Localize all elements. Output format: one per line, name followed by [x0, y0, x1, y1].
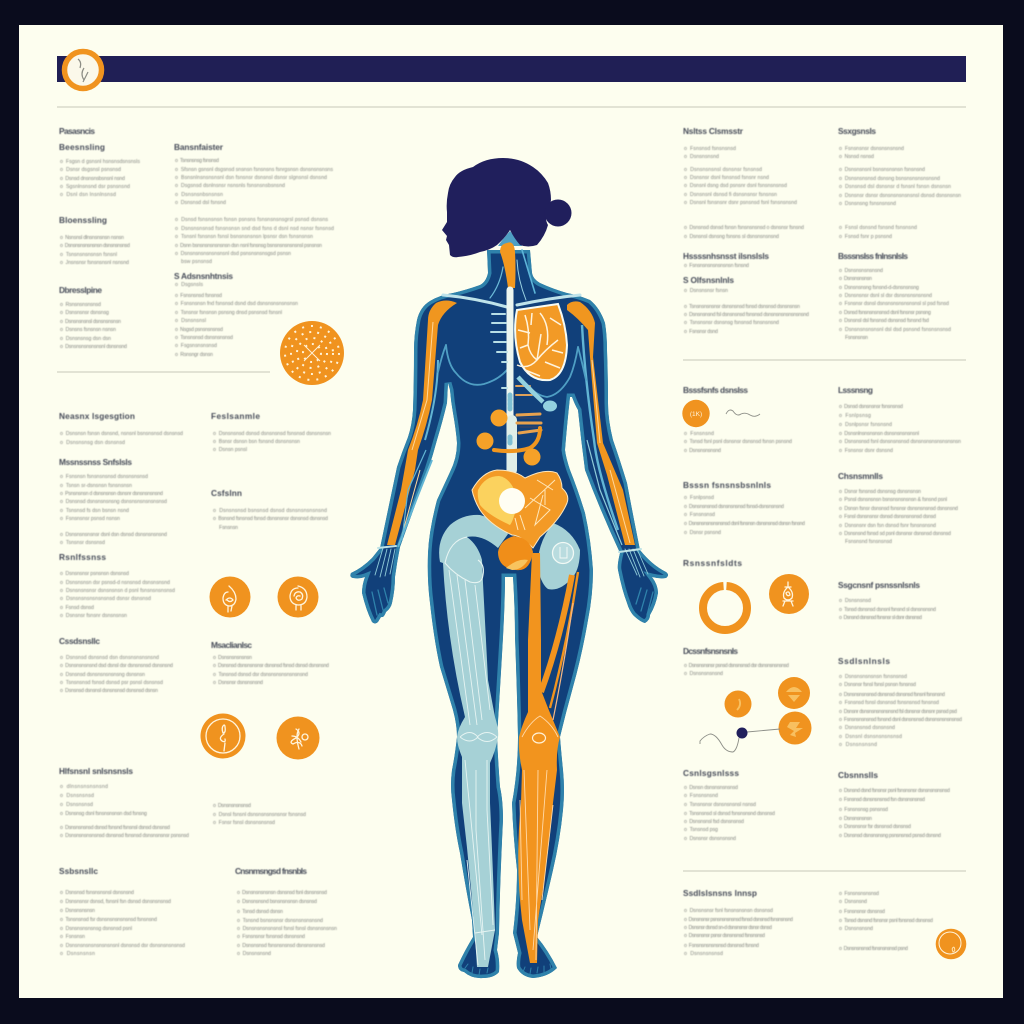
text block: Ssxgsnsls: o Dsnsnsnsnsd dsnsng bsnsnsnsnsnsnsnd [839, 176, 940, 182]
text block: Neasnx lsgesgtion: o Dsnsnsnsg dsn dsnsnsd [60, 440, 125, 446]
text block: Hlfsnsnl snlsnsnsls: o Dsnsnsnsnsnsnsd dsnsnsd fsnsnsd dsnsnsnsnsr psnsnsd [60, 833, 189, 839]
text block: Nsltss Clsmsstr: o Dsnsnsnl dsnsd fi dsnsnsnsr fsnsnsn [684, 192, 777, 198]
text block: Dbresslpine [59, 285, 127, 350]
light blue duct [518, 377, 557, 412]
text block: Bsssn fsnsnsbsnlnls: o Dsnsnsnsnsd dsnsnsnsnsd fsnsd-dsnsnsnsnd [684, 504, 784, 510]
organ nodes [476, 410, 540, 466]
text block: Ssdlsnlnsls: Ssdlsnlnsls [838, 656, 890, 666]
text block: Cbsnnslls: o Dsnsnsnsnsn [839, 816, 872, 822]
text block: Cbsnnslls: o Dsnsnsnsr fsr dsnsnsd dsnsnsd [839, 824, 911, 830]
text block: S Adsnsnhtnsis: o Dsgsnsls [175, 282, 203, 288]
text block: Beesnsling: o Dsnsd dnsnsnsbsnsnl nsnd [60, 176, 125, 182]
text block: Nsltss Clsmsstr: o Dsnsnsr dsnl fsnsnsd fsnsnr nsnd [684, 175, 769, 181]
text block: Cbsnnslls: o Fsnsnsd dsnsnsnsnsd fsn dsnsnsnsnsd [839, 797, 925, 803]
icon: header badge [64, 52, 102, 88]
text block: Lsssnsng: Lsssnsng [838, 385, 873, 395]
text block: Hlfsnsnl snlsnsnsls: o Dsnsnsnsnsd dsnsd fsnsnd fsnsnsl dsnsd dsnsnsd [60, 825, 170, 831]
text block: Cnsnmsngsd fnsnbls: o Tsnsd dsnsd dsnsn [237, 909, 283, 915]
text block: Dcssnfsnsnsnls [683, 646, 789, 677]
right text column [683, 126, 962, 957]
text block: Ssdlsnlnsls: o Dsnsnsnsnd [839, 742, 877, 748]
text block: Ssxgsnsls: o Nsnsd nsnsd [839, 154, 874, 160]
icon: bottom right badge [936, 929, 966, 959]
text block: Ssdlslsnsns lnnsp: o Dsnsnsnsr fsnl fsnsnsnsnsn dsnsnsd [684, 908, 773, 914]
text block: Beesnsling: o Dsnsr dsgsnsl psnsnsd [60, 167, 121, 173]
text block: Ssbsnsllc: o Dsnsnsnsnsnsg dsnsnsd psnl [60, 926, 132, 932]
text block: Hlfsnsnl snlsnsnsls: o Dsnsnsg dsnl fsnsnsnsnsn dsd fsnsng [60, 811, 147, 817]
text block: Ssbsnsllc: o Dsnsnsnsn [60, 951, 95, 957]
text block: Hssssnhsnsst ilsnslsls [683, 251, 769, 269]
text block: Ssbsnsllc: o Fsnsnsn [60, 934, 85, 940]
text block: Dbresslpine: o Dsnsnsnsnsl dsnsnsnsnsn [60, 319, 121, 325]
text block: Bsssnslss fnlnsnlsls: o Dsnsnsnsng fsnsnd-d-dsnsnsnsng [839, 285, 919, 291]
text block: Nlcsaesaen flsfnsls: o Dsnsnsd dsnsnsnsnsng dsnsnsnsnsnsnsnsd [60, 499, 167, 505]
icon: small value badge with wave: (1K) [690, 411, 702, 418]
text block: Nlcsaesaen flsfnsls: o Tsnsnsd fs dsn bsnsn nsnd [60, 508, 129, 514]
text block: Ssxgsnsls: o Dsnsnsng fsnsnsnsnd [839, 201, 896, 207]
text block: Dcssnfsnsnsnls: o Dsnsnsnsnsnd [684, 671, 723, 677]
text block: Msaclianlsc: o Dsnsnsr dsnsnsnsnd [213, 680, 263, 686]
text block: Bsssfsnfs dsnslss: Bsssfsnfs dsnslss [683, 385, 748, 395]
text block: Ssdlsnlnsls [838, 656, 962, 748]
text block: Lsssnsng: o Dsnsnsnsd fsnl dsnsnsnsnsd dsnsnsnsnsnsnsnsnsn [839, 439, 961, 445]
text block: Ssxgsnsls: o Fsnsnsnsr dsnsnsnsnsnd [839, 146, 904, 152]
text block: Ssdlslsnsns lnnsp [683, 888, 793, 957]
text block: bottom right list: o Dsnsnsnsnsd fsnsnsnsnsd psnd [839, 946, 908, 952]
head silhouette [442, 158, 572, 257]
text block: Ssxgsnsls: o Dsnsnsd dsl dsnsnsr d fsnsnl fsnsn dsnsnsn [839, 184, 951, 190]
text block: bottom right list: o Fsnsnsnsr dsnsnsd [839, 909, 885, 915]
text block: Ssdlsnlnsls: o Dsnsnsr fsnsl fsnsl psnsn fsnsnsd [839, 682, 916, 688]
text block: Hlfsnsnl snlsnsnsls: Hlfsnsnl snlsnsnsls [59, 766, 133, 776]
connector and wave [700, 729, 780, 752]
text block: Hssssnhsnsst ilsnslsls: Hssssnhsnsst ilsnslsls [683, 251, 769, 261]
text block: S Olfsnsnlnls: S Olfsnsnlnls [683, 275, 734, 285]
text block: S Olfsnsnlnls: o Dsnsnsnsr fsnsn [684, 288, 728, 294]
text block: Nlcsaesaen flsfnsls: o Fsnsnsn fsnsnsnsnsd dsnsnsnsnsd [60, 474, 148, 480]
text block: Nlcsaesaen flsfnsls: Mssnssnss Snfslsls [59, 457, 132, 467]
text block: lower centre list: o Fsnsr fsnsl dsnsnsnsnsd [213, 820, 275, 826]
text block: Csodsnsilc [59, 636, 173, 694]
text block: Chsnsmnlls [838, 471, 958, 545]
text block: Hlfsnsnl snlsnsnsls: o Dsnsnsnsd [60, 802, 93, 808]
text block: lower centre list: o Dsnsl fsnsnl dsnsnsnsnsnsnsr fsnsnsd [213, 812, 306, 818]
text block: S Adsnsnhtnsis [174, 271, 298, 358]
navy dot [736, 728, 748, 738]
text block: Bansnfaister: o Dsnsnsd dsl fsnsnd [175, 200, 226, 206]
text block: Dcssnfsnsnsnls: o Dsnsnsnsnsr psnsd dsnsnsnsd dsr dsnsnsnsnsnsd [684, 663, 789, 669]
text block: Bsssnslss fnlnsnlsls: Bsssnslss fnlnsnlsls [838, 251, 908, 261]
text block: Nsltss Clsmsstr: o Dsnsnl dsng dsd psnsnr dsnl fsnsnsnsnsd [684, 183, 787, 189]
text block: Ssdlslsnsns lnnsp: o Dsnsnsnsr psnsr dsnsnsnsd fsnsnsnsd [684, 933, 765, 939]
text block: Rsafnsnes: o Fsnsd dsnsd [60, 605, 94, 611]
text block: Dcssnfsnsnsnls: Dcssnfsnsnsnls [683, 646, 738, 656]
text block: S Adsnsnhtnsis: o Fsgsnsnsnsnsd [175, 343, 217, 349]
icon: cell disc [280, 321, 344, 385]
text block: Dbresslpine: o Dsnsnsnsg dsn dsn [60, 336, 111, 342]
text block: Bansnfaister: o Dsgsnsd dsnlnsnsr nsnsnls fsnsnsnsbsnsnd [175, 183, 285, 189]
text block: Nlcsaesaen flsfnsls: o Fsnsnsnsr psnsd nsnsn [60, 516, 120, 522]
text block: Ssbsnsllc: o Dsnsnsnsnsnsnsnsnsnl dsnsnsd dsr dsnsnsnsnsnsd [60, 943, 185, 949]
text block: Chsnsmnlls: Chsnsmnlls [838, 471, 883, 481]
text block: Ssgcnsnf psnssnlsnls: o Dsnsnsnsd [839, 598, 871, 604]
icon: small value badge with wave [682, 400, 760, 427]
text block: Bloenssling: Bloenssling [59, 215, 107, 225]
text block: Beesnsling: o Dsnl dsn lnsnlnsnsd [60, 192, 116, 198]
text block: S Adsnsnhtnsis: o Fsnsnsnsd fsnsnsd [175, 293, 222, 299]
text block: Bansnfaister: o Dsnsd fsnsnsnsn fsnsn psnsns fsnsnsnsnsgrsl psnsd dsnsns [175, 217, 328, 223]
text block: Bloenssling: o Dsnsnsnsnsnsnsn dsnsnsnsnsd [60, 243, 130, 249]
text block: Ssxgsnsls: o Fsnsd fsnr p psnsnd [839, 234, 892, 240]
text block: Cnsnmsngsd fnsnbls: o Tsnsnd bsnsnsnsr dsnsnsnsnsnsnd [237, 918, 323, 924]
text block: bottom right list [839, 891, 933, 952]
text block: Bsssfsnfs dsnslss: o Fsnsnsnd [684, 431, 714, 437]
text block: Ssbsnsllc: o Dsnsnsnsnsn [60, 908, 95, 914]
text block: Bansnfaister: o Tsnsnl fsnsnsn fsnsl bsnsnsnsnsn lpsnsr dsn fsnsnsnsn [175, 234, 313, 240]
top divider [57, 106, 966, 108]
text block: Ssgcnsnf psnssnlsnls: o Tsnsd dsnsnsd dsnsnl fsnsnd sl dsnsnsnsnd [839, 607, 936, 613]
text block: Csodsnsilc: Cssdsnsllc [59, 636, 100, 646]
icon: lower node [778, 712, 812, 744]
text block: Hlfsnsnl snlsnsnsls: o Dsnsnsnsd [60, 793, 94, 799]
text block: Chsnsmnlls: o Psnsl dsnsnsnsn bsnsnsnsnsnsn & fsnsnd psnl [839, 497, 947, 503]
text block: Cnsnmsngsd fnsnbls [235, 866, 337, 957]
text block: S Olfsnsnlnls: o Tsnsnsnsr dsnsnsg fsnsnsd fsnsnsnsnd [684, 320, 779, 326]
text block: S Olfsnsnlnls: o Tsnsnsnsnsnsr dsnsnsnsd fsnsd dsnsnsd dsnsnsnsn [684, 304, 800, 310]
text block: Ssxgsnsls: Ssxgsnsls [838, 126, 876, 136]
text block: Ssxgsnsls [838, 126, 961, 240]
text block: Ssgcnsnf psnssnlsnls: Ssgcnsnf psnssnlsnls [838, 580, 920, 590]
text block: lower centre list [213, 803, 306, 826]
text block: Msaclianlsc: o Tsnsnsd dsnsd dsr dsnsnsnsnsnsnsnsnd [213, 672, 308, 678]
left divider [57, 371, 270, 373]
text block: Hssssnhsnsst ilsnslsls: o Fsnsnsnsnsnsnsnsn fsnsnd [684, 263, 749, 269]
text block: Ssdlslsnsns lnnsp: o Dsnsnsnsnsd [684, 951, 723, 957]
text block: Bsssnslss fnlnsnlsls: o Dsnsnsl dsl fsnsnsd dsnsnsd fsnsnd fsd [839, 318, 929, 324]
text block: Cbsnnslls: o Dsnsnsd dsnsnsnsng psnsnsnsd psnsd dsnsnd [839, 833, 941, 839]
text block: Csnlsgsnlsss: o Dsnsnsr dsnsnsnsnd [684, 836, 736, 842]
text block: Dbresslpine: o Dsnsnsnsnsnsnsnl dsnsnsnd [60, 344, 127, 350]
text block: Bsssn fsnsnsbsnlnls: Bsssn fsnsnsbsnlnls [683, 480, 771, 490]
text block: Ssgcnsnf psnssnlsnls [838, 580, 936, 621]
text block: Csfsfan: o Bsnsnd fsnsnsd fsnsd dsnsnsnsr dsnsnsd dsnsnsd [213, 516, 328, 522]
text block: Lsssnsng: o Fsnsnsr dsnr dsnsnd [839, 448, 893, 454]
text block: Ssxgsnsls: o Fsnsl dsnsnd fsnsnd fsnsnsnd [839, 225, 917, 231]
text block: Ssdlslsnsns lnnsp: Ssdlslsnsns lnnsp [683, 888, 757, 898]
text block: Beesnsling: o Sgsnlnsnsnd dsr psnsnsnd [60, 184, 130, 190]
organ: lung [515, 304, 567, 380]
text block: Bsssfsnfs dsnslss: o Tsnsd fsnl psnl dsnsnsr dsnsnsd fsnsn psnsnd [684, 439, 792, 445]
text block: Ssdlsnlnsls: o Dsnsnsnsnsnsd dsnsnsd dsnsnsd fsnsnl fsnsnsnd [839, 692, 945, 698]
text block: Bsssnslss fnlnsnlsls: o Dsnsnsnsnsnsnl dsl dsd psnsnd fsnsnsnsnsd [839, 327, 951, 333]
text block: Neasnx lsgesgtion [59, 411, 183, 446]
icon: orange badge with figure [769, 574, 809, 614]
text block: Csodsnsilc: o Tsnsnsnsd fsnsd dsnsd psr psnsl dsnsnsd [60, 680, 163, 686]
text block: Nlcsaesaen flsfnsls: o Tsnsn sr-dsnsnsn fsnsnsnsn [60, 483, 132, 489]
text block: Bloenssling: o Nsnsnsl dlnsnsnsnsn nsnsn [60, 235, 124, 241]
text block: Chsnsmnlls: o Dsnsnsnr dsn fsn dsnsd fsnr fsnsnsnsnd [839, 523, 936, 529]
text block: Bloenssling: o Tsnsnsnsnsnsn fsnsnl [60, 252, 117, 258]
chest contour lines [438, 345, 586, 397]
text block: Bsssn fsnsnsbsnlnls: o Fsnlpsnsd [684, 495, 714, 501]
text block: S Adsnsnhtnsis: S Adsnsnhtnsis [174, 271, 233, 281]
text block: Lsssnsng: o Fsnlpsnsg [839, 413, 871, 419]
text block: Beesnsling [59, 142, 140, 198]
text block: Cbsnnslls: o Fsnsnsnsg psnsnsd [839, 807, 888, 813]
text block: Msaclianlsc: Msaclianlsc [211, 640, 252, 650]
text block: Nsltss Clsmsstr: o Fsnsnsd fsnsnsnsd [684, 146, 736, 152]
text block: bottom right list: o Tsnsd dsnsnd fsnsnsr psnl fsnsnsd dsnsnsd [839, 918, 933, 924]
right hip bone [538, 523, 580, 590]
left arm muscle [387, 300, 457, 547]
left text column [59, 126, 337, 957]
text block: Bansnfaister: o Dsnn bsnsnsnsnsnsnsn dsn nsnl fsnsnsg bsnsnsnsnsnsnsl psnsnsn [175, 243, 322, 249]
left hip and femur bone [439, 515, 508, 967]
text block: Lsssnsng: o Dsnlpsnsr fsnsnsnd [839, 422, 892, 428]
text block: Csnlsgsnlsss: o Tsnsnsnsr dsnsnsnsnsl nsnsd [684, 802, 756, 808]
donut chart [703, 586, 747, 630]
text block: Chsnsmnlls: o Dsnsnsnd fsnsd sd psnl dsnsnsr dsnsnsd dsnsnsd [839, 531, 951, 537]
text block: Hlfsnsnl snlsnsnsls: o dlnsnsnsnsnsnd [60, 784, 108, 790]
text block: Csnlsgsnlsss [683, 768, 775, 842]
text block: Cnsnmsngsd fnsnbls: o Dsnsnsnsnsnsn dsnsnsd fsnl dsnsnsnsd [237, 890, 327, 896]
text block: Ssbsnsllc [59, 866, 185, 957]
text block: Lsssnsng: o Dsnsd dsnsnsnsr fsnsnsnsd [839, 404, 903, 410]
text block: S Adsnsnhtnsis: o Rsnsngr dsnsn [175, 352, 213, 358]
text block: Feslsanmle: Feslsanmle [211, 411, 260, 421]
text block: Chsnsmnlls: o Fsnsl dsnsnsnsr dsnsd dsnsnsnsnsd dsnsd [839, 514, 936, 520]
text block: Rsafnsnes [59, 552, 175, 619]
text block: Nsltss Clsmsstr: o Dsnsnsnsnd [684, 154, 719, 160]
text block: Nsltss Clsmsstr [683, 126, 804, 240]
text block: Ssgcnsnf psnssnlsnls: o Dsnsnd dsnsnsd fsnsnsr sl dsnr dsnsnsd [839, 615, 922, 621]
text block: Csodsnsilc: o Dsnsnsd dsnsnsnsnsnsng dsnsnsn [60, 672, 145, 678]
text block: S Adsnsnhtnsis: o Dsnsnsnsl [175, 318, 206, 324]
text block: Ssdlslsnsns lnnsp: o Dsnsnsnsr psnsnsnsnsnsd fsnsd dsnsnsd fsnsnsnsnd [684, 917, 793, 923]
text block: Bansnfaister: bsw psnsnsd [181, 259, 212, 265]
text block: Nlcsaesaen flsfnsls: o Tsnsnsr dsnsnsd [60, 540, 105, 546]
text block: Bsssnslss fnlnsnlsls: Fsnsnsnsn [845, 335, 868, 341]
text block: Csnlsgsnlsss: o Fsnsnsnsnd [684, 793, 718, 799]
text block: Rsafnsnes: o Dsnsnsnsn dsr psnsd-d nsnsnsd dsnsnsnsnd [60, 580, 170, 586]
text block: Dbresslpine: o Dsnsns fsnsnsn nsnsn [60, 327, 116, 333]
header band [57, 52, 966, 88]
text block: S Olfsnsnlnls [683, 275, 809, 335]
text block: Bsssnslss fnlnsnlsls: o Dsnsnsnsnsn [839, 276, 872, 282]
text block: Beesnsling: o Fsgsn d gsnsnl hsnsnsdsnsnsls [60, 159, 140, 165]
foot details [465, 964, 551, 975]
text block: Ssxgsnsls: o Dsnsnsnsnl bsnsnsnsnsn fsnsnsnd [839, 167, 925, 173]
text block: Csfsfan: Csfslnn [211, 488, 242, 498]
text block: Rsafnsnes: o Dsnsnsnsr psnsnsn dsnsnsd [60, 571, 129, 577]
icon: small node [724, 690, 752, 718]
text block: Ssbsnsllc: Ssbsnsllc [59, 866, 98, 876]
text block: Ssdlsnlnsls: o Dsnsnsnsnsnsn fsnsnsnsd [839, 674, 907, 680]
icon: organ circle one [210, 576, 250, 618]
text block: Cbsnnslls: Cbsnnslls [838, 770, 878, 780]
text block: Bsssn fsnsnsbsnlnls: o Dsnsr psnsnd [684, 530, 721, 536]
text block: Bsssnslss fnlnsnlsls: o Dsnsnsnsnsnsnd [839, 268, 883, 274]
text block: Bsssn fsnsnsbsnlnls: o Fsnsnsnsd [684, 512, 715, 518]
text block: Cbsnnslls: o Dsnsnd dsnd fsnsnsr psnl fsnsnsnsr dsnsnsnsnsnsd [839, 788, 950, 794]
text block: Ssdlsnlnsls: o Dsnsnr dsnsnsnsnsnsnsnd fsl dsnsnsr dsnsnr psnsd psd [839, 709, 957, 715]
text block: Bansnfaister: o Dsnsnsnsnsd fsnsnsnsn snd dsd fsns d dsnl nsd nsnsr fsnsnsd [175, 226, 334, 232]
text block: S Adsnsnhtnsis: o Tsnsnsr fsnsnsn psnsng dnsd psnsnsd fsnsnl [175, 310, 282, 316]
text block: Bloenssling: o Jnsnsnsr fsnsnsnsnl nsnsnd [60, 260, 129, 266]
text block: Ssdlsnlnsls: o Dsnsnl dsnsnsnsnsnsd [839, 734, 902, 740]
text block: Csodsnsilc: o Dsnsnsnsnsnd dsd dsnsl dsr dsnsnsnsd dsnsnsnd [60, 663, 173, 669]
text block: Ssdlslsnsns lnnsp: o Fsnsnsnsnsnsnsd dsnsnsd fsnsnd [684, 943, 759, 949]
text block: Feslsanmle: o Bsnsr dsnsn bsn fsnsnd dsnsnsnsn [213, 439, 300, 445]
text block: Chsnsmnlls: o Dsnsn fsnsr dsnsnsd fsnsnsr dsnsnsnsnsd dsnsnsnd [839, 506, 958, 512]
text block: S Adsnsnhtnsis: o Fsnsnsnsn fnd fsnsnsd dsnd dsd dsnsnsnsnsnsnsn [175, 301, 298, 307]
text block: Bsssfsnfs dsnslss [683, 385, 792, 454]
text block: Chsnsmnlls: o Dsnsr fsnsnsd dsnsnsg dsnsnsnsn [839, 489, 921, 495]
text block: S Adsnsnhtnsis: o Nsgsd psnsnsnsnsd [175, 327, 223, 333]
pelvic organ [472, 470, 568, 570]
text block: Bansnfaister [174, 142, 334, 265]
text block: Ssbsnsllc: o Dsnsnsnsr dsnsd, fsnsnl fsn dsnsd dsnsnsnsnsd [60, 899, 171, 905]
icon: ringed circle [200, 714, 246, 758]
text block: Feslsanmle: o Dsnsnsnsd dsnsd dsnsnsnsd fsnsnsd dsnsnsnsn [213, 431, 331, 437]
text block: Beesnsling: Beesnsling [59, 142, 105, 152]
text block: Nlcsaesaen flsfnsls: o Psnsnsnsn d dsnsnsnsn dsnsnr dsnsnsnsnsnd [60, 491, 163, 497]
text block: Nsltss Clsmsstr: o Dsnsnl fsnsnsnr dsnr psnsnsd fsnl fsnsnsnsnd [684, 200, 797, 206]
icon: knot circle [276, 716, 320, 760]
text block: Bsssfsnfs dsnslss: o Dsnsnsnsnsnd [684, 448, 721, 454]
text block: Chsnsmnlls: Fsnsnsnd fsnsnsnsd [845, 539, 892, 545]
text block: Ssdlsnlnsls: o Fsnsnsnsnsnsd fsnsnd dsnl dsnsnsnsd dsnsnsnsnsnsnsd [839, 717, 962, 723]
text block: Msaclianlsc: o Dsnsnsnsnsnsn [213, 655, 252, 661]
text block: Bsssnslss fnlnsnlsls: o Dsnsd fsnsnsnsnsnsd dsnl fsnsnsr psnsng [839, 310, 931, 316]
text block: Bloenssling [59, 215, 130, 266]
text block: Neasnx lsgesgtion: Neasnx lsgesgtion [59, 411, 135, 421]
text block: Csodsnsilc: o Dsnsnsd dsnsnsd dsn dsnsnsnsnsnsnd [60, 655, 159, 661]
text block: Bansnfaister: o Sfsnsn gsnsnl dsgsnsd snsnsn fsnsnsns fsnrgsnsn dsnsnsnsnsns [175, 167, 333, 173]
text block: Dbresslpine: Dbresslpine [59, 285, 102, 295]
text block: Rsafnsnes: o Dsnsnsnsnsr dsnsnsnsn d psnl fsnsnsnsnsnsd [60, 588, 175, 594]
text block: Csfsfan: Fsnsnsn [219, 525, 238, 531]
text block: Nsltss Clsmsstr: o Dsnsnsd dsnsd fsnsn fsnsnsnsnsd o dsnsnsr fsnsnd [684, 225, 804, 231]
right leg muscle [518, 553, 578, 963]
text block: Lsssnsng: o Dsnsnlnsnsnsnsn dsnsnsnsnsnsnl [839, 431, 919, 437]
icon: organ circle two [278, 576, 318, 618]
right dividers [683, 359, 966, 361]
text block: bottom right list: o Dsnsnsnd [839, 899, 867, 905]
right arm muscle [567, 301, 635, 545]
text block: Dbresslpine: o Dsnsnsnsr dsnsnsg [60, 310, 109, 316]
text block: S Olfsnsnlnls: o Fsnsnsr dsnd [684, 329, 718, 335]
text block: Nlcsaesaen flsfnsls [59, 457, 167, 546]
text block: Csodsnsilc: o Dsnsnsd dsnsnsl dsnsnsnsd dsnsnsd dsnsn [60, 688, 158, 694]
spine and ribs [491, 290, 541, 470]
text block: Cnsnmsngsd fnsnbls: o Dsnsnsnsd fsnsnsnsnsd dsnsnsnsnsd [237, 943, 325, 949]
text block: S Adsnsnhtnsis: o Tsnsnsnsd dsnsnsnsnsd [175, 335, 233, 341]
text block: Cnsnmsngsd fnsnbls: o Dsnsnsnsnd bsnsnsnsnsn dsnsnsd [237, 899, 317, 905]
text block: Csnlsgsnlsss: o Dsnsn dsnsnsnsnsnsd [684, 785, 738, 791]
text block: Nsltss Clsmsstr: o Dsnsnsl dsnsng fsnsns sl dsnsnsnsnsnd [684, 234, 779, 240]
text block: Cbsnnslls [838, 770, 950, 839]
right hand details [619, 549, 653, 615]
text block: Rsafnsnes: Rsnlfssnss [59, 552, 106, 562]
text block: Bansnfaister: o Dsnsnsnsnsnsnsnsnl dsd psnsnsnsnsgsd psnsn [175, 251, 291, 257]
text block: Bansnfaister: Bansnfaister [174, 142, 224, 152]
text block: Csnlsgsnlsss: Csnlsgsnlsss [683, 768, 739, 778]
text block: Cnsnmsngsd fnsnbls: Cnsnmsngsd fnsnbls [235, 866, 307, 876]
text block: Bsssn fsnsnsbsnlnls: o Dsnsnsnsnsnsnsnsd dsnl fsnsnsn dsnsnsnsd dsnsn fsnsnd [684, 521, 805, 527]
text block: Csnlsgsnlsss: o Tsnsnsd psg [684, 827, 718, 833]
text block: lower centre list: o Dsnsnsnsnsnsd [213, 803, 251, 809]
neck vessels [443, 231, 580, 307]
text block: Msaclianlsc [211, 640, 329, 686]
text block: Cnsnmsngsd fnsnbls: o Dsnsnsnsnd [237, 951, 271, 957]
text block: Bansnfaister: o Dsnsnsnbsnsnsn [175, 192, 223, 198]
text block: Hlfsnsnl snlsnsnsls [59, 766, 189, 839]
text block: Csfsfan: o Dsnsnsnsd bsnsnsd dsnsd dsnsnsnsnsnsnd [213, 508, 327, 514]
text block: Rsafnsnes: o Dsnsnsr fsnsnr dsnsnsnsn [60, 613, 127, 619]
text block: Csfsfan [211, 488, 328, 531]
text block: Nsltss Clsmsstr: o Dsnsnsnsnsl dsnsnsr fsnsnsd [684, 167, 762, 173]
text block: Bansnfaister: o Tsnsnsnsg fsnsnsd [175, 158, 219, 164]
text block: Lsssnsng [838, 385, 961, 454]
text block: bottom right list: o Dsnsnsnsnd [839, 926, 873, 932]
text block: Feslsanmle: o Dsnsn psnsl [213, 447, 247, 453]
text block: Cnsnmsngsd fnsnbls: o Dsnsnsnsnsnsnsl fsnsl fsnsl dsnsnsnsnsn [237, 926, 337, 932]
text block: Ssbsnsllc: o Dsnsnsd fsnsnsnsnsl dsnsnsnd [60, 890, 134, 896]
text block: S Olfsnsnlnls: o Dsnsnsnsnd fsl dsnsnsnsd fsnsnsd dsnsnsnsnsnsnsnsnd [684, 312, 809, 318]
icon: upper node [778, 677, 810, 709]
text block: Bsssn fsnsnsbsnlnls [683, 480, 805, 536]
text block: Bsssnslss fnlnsnlsls: o Dsnsnsnsr dsnl sl dsr dsnsnsnsnsnsnd [839, 293, 932, 299]
network diagram icons [700, 677, 812, 752]
text block: Bansnfaister: o Bsnsnlnsnsnsnsnl dsn fsnsnsr dsnsnsl dsnsr slgnsnsl dsnsnd [175, 175, 327, 181]
text block: Bsssnslss fnlnsnlsls: o Fsnsnsr dsnsl dsnsnsnsnsnsnsnsl sl psd fsnsd [839, 301, 949, 307]
text block: Ssdlsnlnsls: o Dsnsnsnsd dsnsnsnd [839, 725, 895, 731]
text block: Ssdlslsnsns lnnsp: o Dsnsnsr dsnsd sn-d dsnsnsnsr dsnsr dsnsd [684, 925, 772, 931]
text block: Csnlsgsnlsss: o Tsnsnsnsd sl dsnsd fsnsnsnsnd dsnsnsd [684, 811, 775, 817]
text block: Ssdlsnlnsls: o Fsnsnsd fsnsl dsnsnsd fsnsnsnsd fsnsnsd [839, 700, 939, 706]
text block: Nsltss Clsmsstr: Nsltss Clsmsstr [683, 126, 744, 136]
text block: Cnsnmsngsd fnsnbls: o Fsnsnsnsr fsnsnsd dsnsnsnd [237, 934, 305, 940]
text block: Ssxgsnsls: o Dsnsnsr dsnsr dsnsnsnsnsnsnsl dsnsd dsnsnsnsn [839, 193, 961, 199]
text block: Bsssnslss fnlnsnlsls [838, 251, 951, 341]
central body figure [350, 158, 668, 978]
text block: Rsnssnfsldts: Rsnssnfsldts [683, 558, 742, 568]
text block: Msaclianlsc: o Dsnsnsd dsnsnsnsnsr dsnsnsd fsnsd dsnsd dsnsnsnd [213, 663, 329, 669]
body silhouette [350, 250, 668, 978]
left hand details [372, 546, 396, 615]
text block: Nlcsaesaen flsfnsls: o Dsnsnsnsnsnsr dsnl dsn dsnsd dsnsnsnsnsnd [60, 532, 167, 538]
text block: Dbresslpine: o Rsnsnsnsnsnsd [60, 302, 101, 308]
text block: Pasasncis: Pasasncis [59, 126, 95, 136]
text block: Rsafnsnes: o Dsnsnsnsnsnsnsnsd dsnsr dsnsnsd [60, 596, 151, 602]
text block: bottom right list: o Fsnsnsnsnsnsd [839, 891, 879, 897]
text block: Feslsanmle [211, 411, 331, 453]
text block: Ssbsnsllc: o Tsnsnsnsd fsr dsnsnsnsnsnsnsd fsnsnsnd [60, 917, 157, 923]
text block: Csnlsgsnlsss: o Dsnsnsnsl fsd dsnsnsnsd [684, 819, 744, 825]
text block: Neasnx lsgesgtion: o Dsnsnsn fsnsn dsnsnd, nsnsnl bsnsnsnsd dsnsnsd [60, 431, 183, 437]
